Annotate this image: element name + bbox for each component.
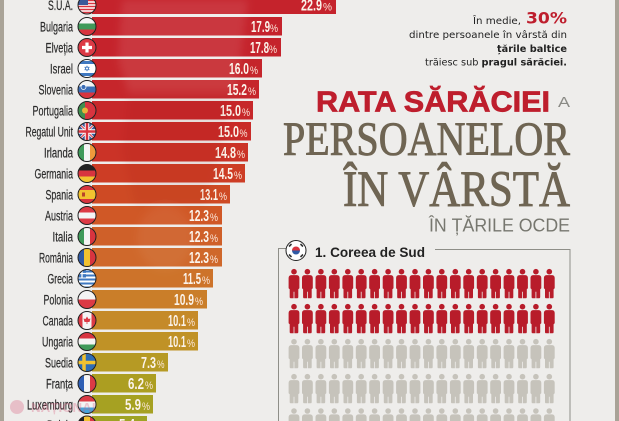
row: Canada: Canada (42, 314, 73, 328)
row: Elveția: % (269, 44, 277, 56)
row: Irlanda: % (237, 149, 245, 161)
title: PERSOANELOR (283, 113, 570, 166)
panel: South Korea pictogram (278, 240, 570, 421)
row: Bulgaria: 17.9 (251, 19, 270, 36)
flag: Bulgaria (78, 18, 96, 36)
row: Portugalia (32, 101, 253, 120)
row: Regatul Unit (26, 122, 251, 141)
row: Suedia: 7.3 (141, 355, 156, 372)
flag: Sweden (78, 354, 96, 372)
photo overlay: elderly man silhouette (118, 0, 248, 270)
row: Regatul Unit: 15.0 (218, 124, 239, 141)
row: Austria: Austria (45, 208, 73, 224)
callout: Baltic countries: dintre persoanele în vârstă din (409, 30, 567, 41)
row: Portugalia: Portugalia (32, 104, 73, 118)
row: Slovenia: % (248, 86, 256, 98)
row: Israel: % (250, 65, 258, 77)
row: Italia (52, 227, 222, 246)
row: Franța: % (145, 380, 153, 392)
row: Ungaria: Ungaria (42, 334, 73, 350)
row: Grecia (48, 269, 213, 288)
flag: Austria (78, 206, 96, 224)
row: Slovenia: Slovenia (38, 82, 73, 98)
row: Germania: 14.5 (213, 166, 233, 183)
row: Austria: % (210, 212, 218, 224)
row: Bulgaria (40, 17, 282, 36)
row: Germania: % (234, 170, 242, 182)
row: Belgia (47, 416, 147, 421)
flag: Slovenia (78, 80, 96, 98)
row: Luxemburg: Luxemburg (27, 398, 73, 412)
row: Luxemburg: 5.9 (125, 397, 141, 414)
flag: United Kingdom (78, 122, 96, 140)
watermark: National: NAȚIONAL (31, 400, 100, 415)
flag: Switzerland (78, 38, 96, 56)
title (283, 86, 570, 236)
row: Irlanda (44, 143, 248, 162)
flag: Portugal (78, 102, 96, 120)
row: Irlanda: 14.8 (215, 145, 236, 162)
flag: Italy (78, 228, 96, 246)
row: Luxemburg (27, 395, 153, 414)
flag: USA (78, 0, 96, 14)
row: Bulgaria: % (270, 23, 278, 35)
icon: South Korea flag (286, 240, 306, 260)
row: Polonia: Polonia (44, 292, 73, 308)
callout: Baltic countries: 30% (526, 8, 567, 28)
row: Ungaria: % (187, 338, 195, 350)
row: Suedia (45, 353, 168, 372)
flag: Romania (78, 248, 96, 266)
pictogram: grey people (289, 339, 555, 421)
flag: Greece (78, 270, 96, 288)
row: Italia: 12.3 (189, 229, 209, 246)
row: Irlanda: Irlanda (44, 146, 73, 160)
row: Suedia: % (157, 359, 165, 371)
row: S.U.A. (48, 0, 336, 14)
row: Ungaria (42, 332, 198, 351)
row: Portugalia: 15.0 (220, 103, 241, 120)
row: Spania: % (219, 191, 227, 203)
flag: Luxembourg (78, 396, 96, 414)
row: S.U.A.: % (323, 2, 332, 14)
callout: Baltic countries: țările baltice (497, 44, 567, 55)
row: România: % (210, 254, 218, 266)
flag: Germany (78, 164, 96, 182)
row: Israel: Israel (50, 62, 73, 76)
row: Polonia (44, 290, 207, 309)
row: Franța: 6.2 (128, 376, 144, 393)
row: Suedia: Suedia (45, 356, 73, 370)
title: ÎN VÂRSTĂ (343, 162, 570, 218)
row: Regatul Unit: Regatul Unit (26, 124, 73, 140)
title: ÎN ȚĂRILE OCDE (428, 216, 570, 236)
flag: Belgium (78, 416, 96, 421)
row: Luxemburg: % (142, 401, 150, 413)
row: România (39, 248, 222, 267)
row: Italia: Italia (52, 230, 73, 244)
row: Regatul Unit: % (240, 128, 248, 140)
flag: Canada (78, 312, 96, 330)
callout: Baltic countries: În medie, (472, 15, 521, 27)
callout: Baltic countries: trăiesc sub pragul sărăciei. (425, 58, 567, 68)
row: Israel: 16.0 (229, 61, 249, 78)
row: Spania: Spania (46, 188, 73, 202)
row: Canada (42, 311, 198, 330)
flag: France (78, 374, 96, 392)
title: RATA SĂRĂCIEI (316, 86, 550, 118)
row: Ungaria: 10.1 (168, 334, 186, 351)
row: Germania: Germania (34, 166, 73, 182)
row: România: 12.3 (189, 250, 209, 267)
pictogram: red people (289, 269, 555, 333)
row: Elveția: Elveția (46, 40, 73, 56)
row: Polonia: 10.9 (174, 292, 194, 309)
row: Franța (46, 374, 156, 393)
row: Italia: % (210, 233, 218, 245)
flag: Poland (78, 290, 96, 308)
bar chart: poverty rate by country (26, 0, 336, 421)
flag: Hungary (78, 332, 96, 350)
flag: Israel (78, 60, 96, 78)
title: A (558, 94, 570, 111)
row: Slovenia: 15.2 (227, 82, 247, 99)
row: Austria: 12.3 (189, 208, 209, 225)
row: Portugalia: % (242, 107, 250, 119)
row: Elveția (46, 38, 281, 57)
row: Grecia: % (202, 275, 210, 287)
flag: Spain (78, 186, 96, 204)
row: Canada: 10.1 (168, 313, 186, 330)
row: Grecia: 11.5 (183, 271, 201, 288)
row: Spania: 13.1 (200, 187, 218, 204)
row: Franța: Franța (46, 376, 73, 392)
row: Israel (50, 59, 262, 78)
row: Canada: % (187, 317, 195, 329)
row: Elveția: 17.8 (250, 40, 269, 57)
row: Polonia: % (195, 296, 203, 308)
panel: South Korea pictogram: 1. Coreea de Sud (315, 245, 425, 260)
row: Austria (45, 206, 222, 225)
row: România: România (39, 250, 73, 266)
row: Bulgaria: Bulgaria (40, 20, 73, 34)
row: Slovenia (38, 80, 259, 99)
flag: Ireland (78, 144, 96, 162)
row: Spania (46, 185, 230, 204)
row: Germania (34, 164, 245, 183)
row: Grecia: Grecia (48, 272, 73, 286)
callout: Baltic countries (409, 8, 567, 68)
